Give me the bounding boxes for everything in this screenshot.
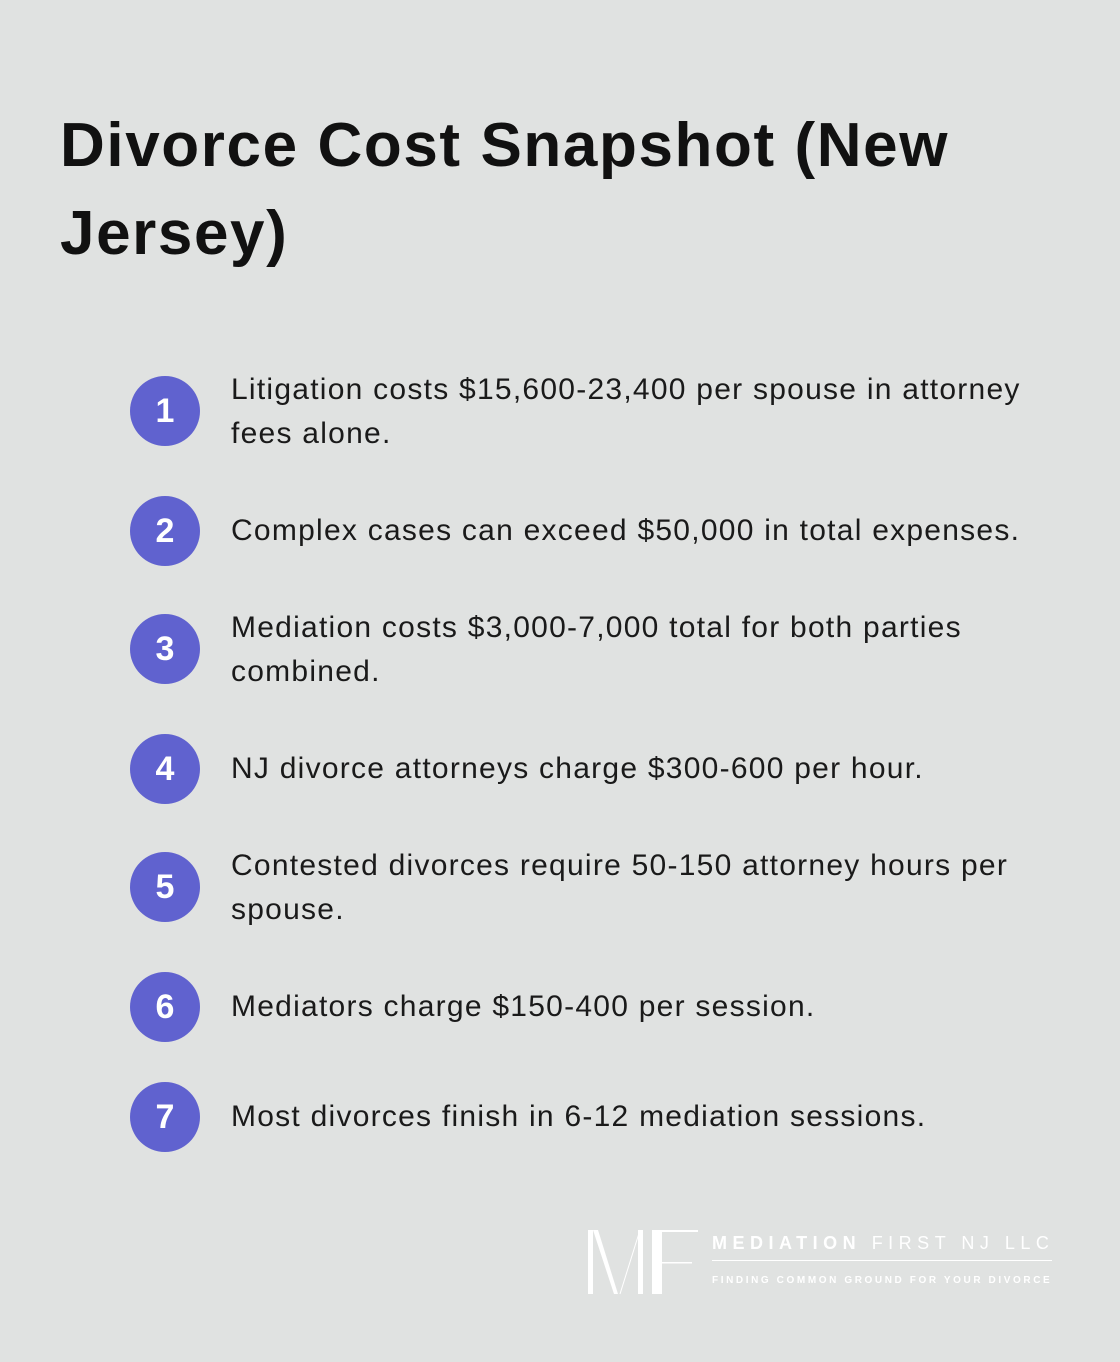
item 3 <box>130 611 962 688</box>
title: Jersey) <box>60 199 288 268</box>
item 4: 4 <box>156 750 174 788</box>
item 3: 3 <box>156 630 174 668</box>
item 7: Most divorces finish in 6-12 mediation sessions. <box>231 1100 926 1133</box>
item 2: 2 <box>156 512 174 550</box>
logo: FINDING COMMON GROUND FOR YOUR DIVORCE <box>712 1275 1052 1286</box>
item 6 <box>130 972 815 1042</box>
item 4: NJ divorce attorneys charge $300-600 per hour. <box>231 752 924 785</box>
item 2: Complex cases can exceed $50,000 in total expenses. <box>231 514 1020 547</box>
logo text: MEDIATION FIRST NJ LLC <box>712 1233 1054 1253</box>
item 1 <box>130 373 1021 450</box>
title <box>60 111 949 268</box>
item 3: Mediation costs $3,000-7,000 total for both parties <box>231 611 962 644</box>
item 1: Litigation costs $15,600-23,400 per spouse in attorney <box>231 373 1021 406</box>
item 1: fees alone. <box>231 417 392 450</box>
item 5 <box>130 849 1008 926</box>
item 3: combined. <box>231 655 381 688</box>
item 2 <box>130 496 1020 566</box>
item 4 <box>130 734 924 804</box>
logo mark <box>588 1230 698 1294</box>
item 5: spouse. <box>231 893 345 926</box>
item 5: Contested divorces require 50-150 attorney hours per <box>231 849 1008 882</box>
item 6: 6 <box>156 988 174 1026</box>
item 1: 1 <box>156 392 174 430</box>
item 7 <box>130 1082 926 1152</box>
item 5: 5 <box>156 868 174 906</box>
item 7: 7 <box>156 1098 174 1136</box>
title: Divorce Cost Snapshot (New <box>60 111 949 180</box>
logo <box>588 1230 1054 1294</box>
item 6: Mediators charge $150-400 per session. <box>231 990 815 1023</box>
